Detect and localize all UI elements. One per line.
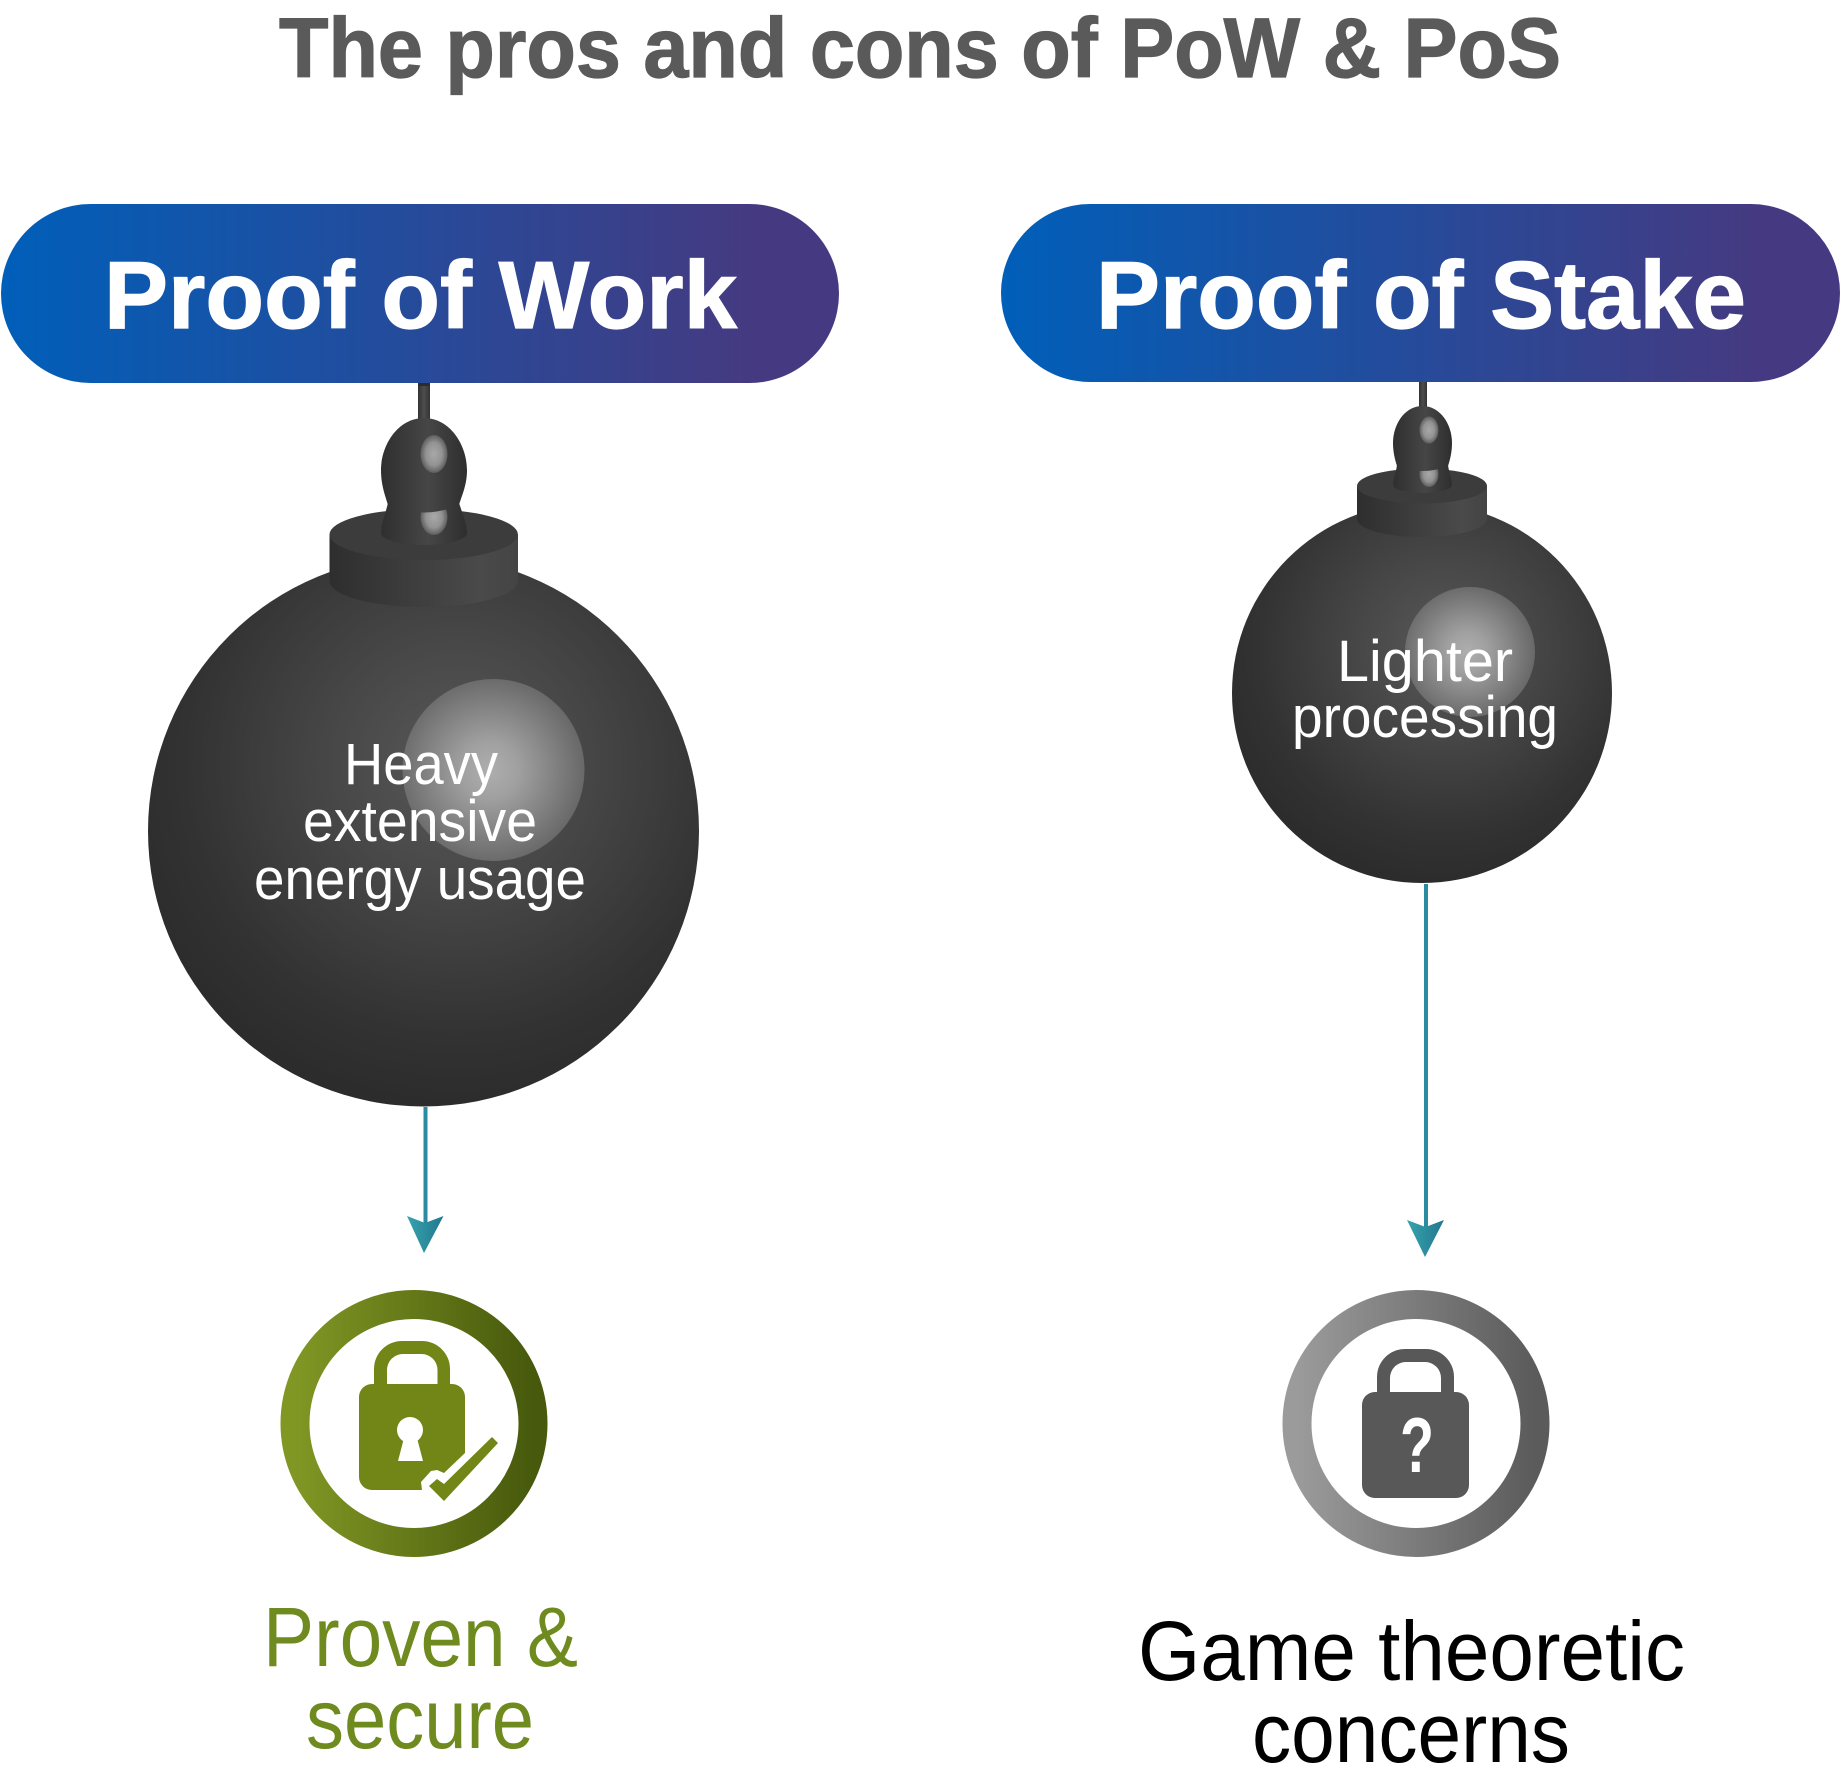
bomb: lighter processing xyxy=(1232,382,1612,883)
panel: proof of stake xyxy=(1001,204,1840,1780)
panel: proof of work xyxy=(1,204,839,1766)
header pill: proof of stake xyxy=(1001,204,1840,382)
label: proven and secure xyxy=(263,1590,578,1766)
label: game theoretic concerns: concerns xyxy=(1252,1686,1570,1780)
bomb label xyxy=(1292,629,1558,750)
header pill: proof of stake: Proof of Stake xyxy=(1096,242,1746,349)
icon: lock with question mark: ? xyxy=(1400,1401,1434,1489)
bomb label: Lighter xyxy=(1337,629,1513,694)
bomb label xyxy=(254,732,586,912)
header pill: proof of work: Proof of Work xyxy=(104,242,738,349)
bomb: heavy energy usage xyxy=(148,383,699,1106)
label: game theoretic concerns: Game theoretic xyxy=(1138,1604,1685,1698)
label: proven and secure: secure xyxy=(306,1672,534,1766)
bomb label: processing xyxy=(1292,685,1558,750)
bomb label: energy usage xyxy=(254,847,586,912)
header pill: proof of work xyxy=(1,204,839,383)
bomb label: Heavy xyxy=(344,732,498,797)
icon: lock with check mark xyxy=(295,1304,533,1542)
arrow: bomb to proven and secure xyxy=(407,1107,444,1253)
label: game theoretic concerns xyxy=(1138,1604,1685,1780)
bomb label: extensive xyxy=(303,789,537,854)
title: The pros and cons of PoW & PoS xyxy=(279,1,1561,95)
label: proven and secure: Proven & xyxy=(263,1590,578,1684)
icon: lock with question mark xyxy=(1297,1304,1535,1542)
arrow: bomb to game theoretic concerns xyxy=(1407,884,1444,1257)
